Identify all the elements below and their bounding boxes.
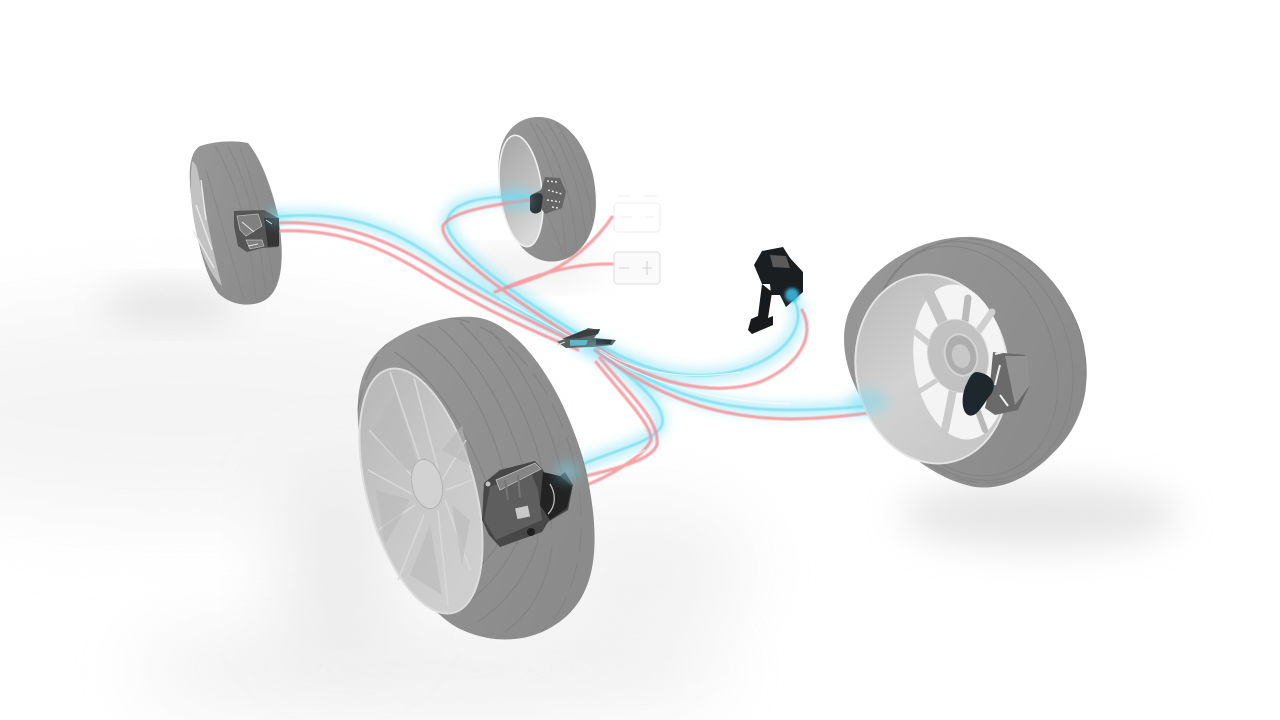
wheel: rear right: [493, 117, 596, 262]
caliper: rear right: [530, 177, 566, 214]
rim sliver: rear left: [191, 162, 222, 286]
caliper: right: [963, 352, 1030, 416]
battery: lower: [614, 252, 660, 284]
tire: rear left: [190, 141, 282, 305]
tread: right: [882, 238, 1087, 484]
rim barrel: right: [841, 262, 1023, 476]
tread: front left: [358, 318, 586, 634]
tire: right: [844, 237, 1087, 488]
wiring: red power lines: [277, 200, 975, 491]
hub: right: [919, 312, 997, 400]
caliper: front left: [482, 461, 573, 547]
battery icons: [614, 196, 660, 284]
caliper: rear left: [234, 210, 279, 252]
spokes: front left: [368, 372, 472, 606]
wheel: right front: [844, 236, 1087, 488]
rim: rear right: [493, 133, 549, 249]
rim: front left: [336, 355, 506, 627]
brake control unit: [557, 328, 616, 348]
wheel: front left: [358, 316, 595, 640]
spokes: right: [915, 285, 992, 430]
hub: front left: [407, 456, 447, 512]
wiring: blue signal lines glow: [275, 197, 985, 470]
brake pedal unit: [748, 247, 803, 334]
tire: front left: [358, 317, 595, 639]
battery: upper: [614, 196, 660, 232]
tread: rear right: [530, 120, 586, 254]
blue glow at connectors: [268, 191, 888, 482]
wheel: rear left: [190, 141, 282, 305]
tread: rear left: [206, 146, 260, 297]
tire: rear right: [498, 117, 596, 262]
rim opening: right: [904, 278, 1016, 446]
